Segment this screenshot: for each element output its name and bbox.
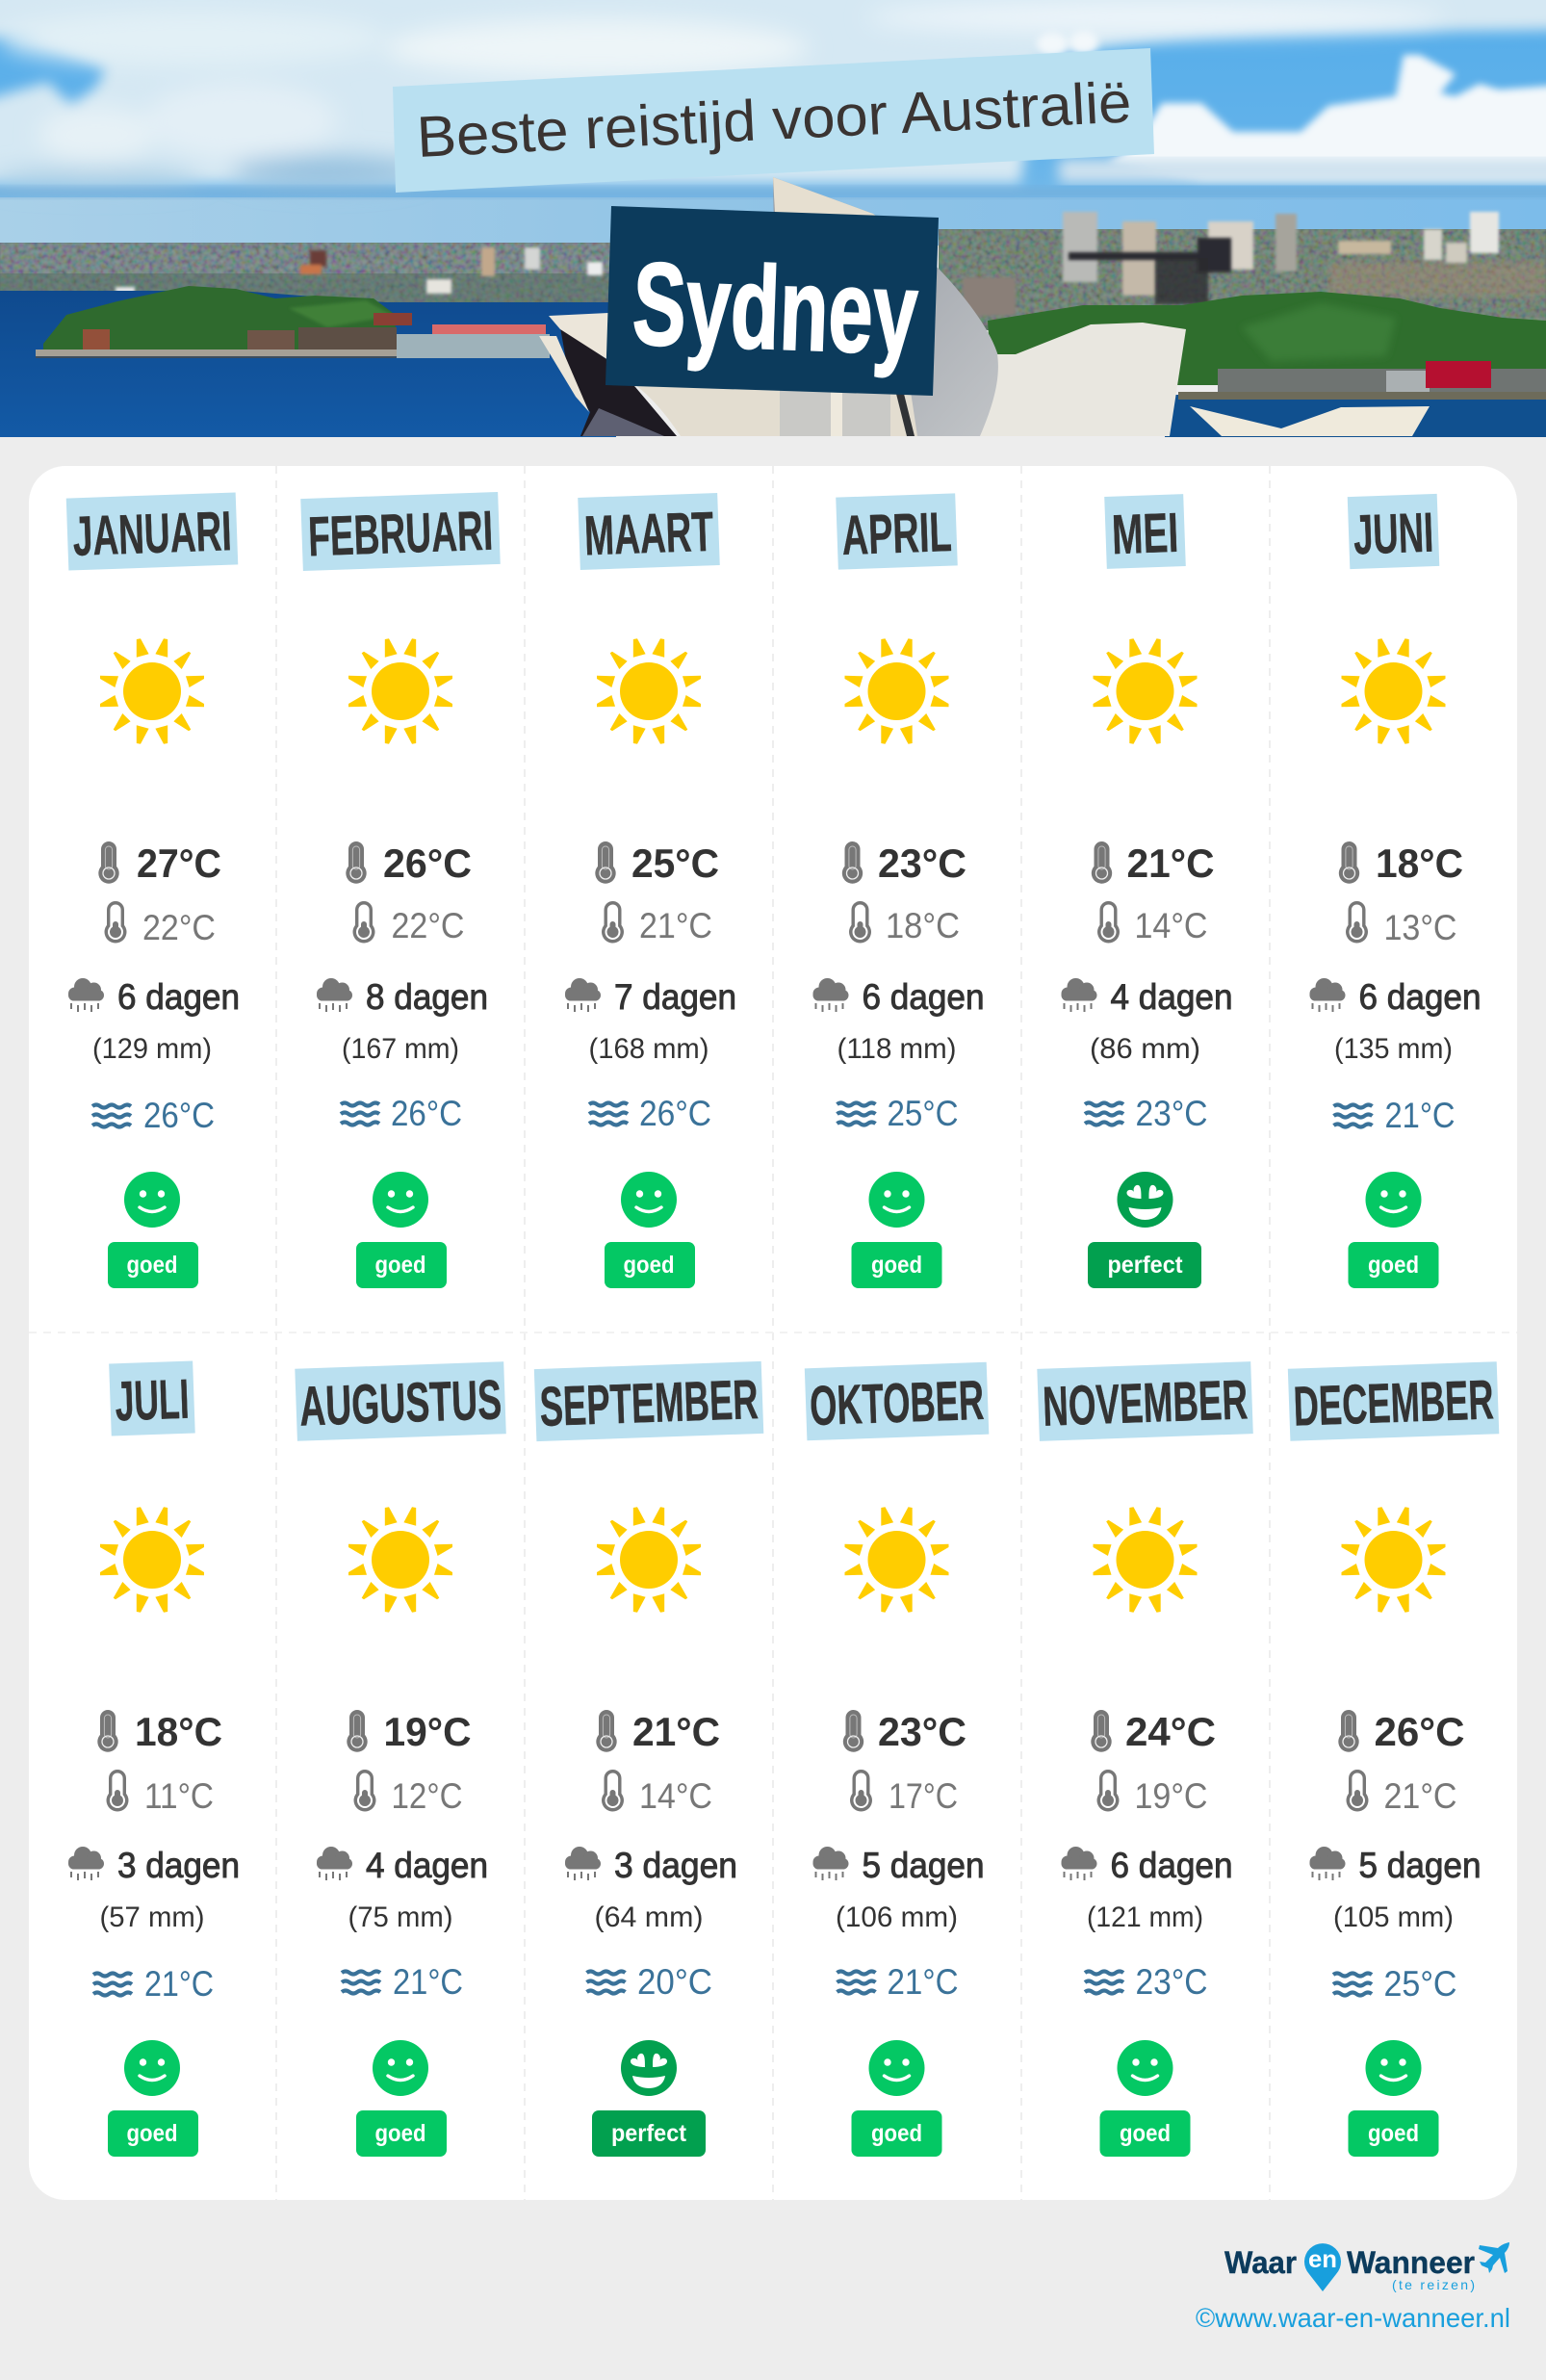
rating: [108, 1242, 198, 1288]
ferry: [397, 334, 550, 358]
column: april: [812, 493, 984, 1288]
rain days: 7 dagen: [614, 977, 736, 1017]
icon: sun: [1342, 1507, 1446, 1613]
rain days: 4 dagen: [1111, 977, 1232, 1017]
rain days: [317, 977, 488, 1017]
rating: goed: [871, 2120, 922, 2147]
rainfall: (135 mm): [1334, 1033, 1453, 1065]
city heading: Sydney: Sydney: [631, 238, 920, 378]
icon: smiley: [124, 2040, 180, 2096]
sea temperature: 21°C: [144, 1964, 214, 2004]
rain days: [317, 1846, 488, 1885]
sea temperature: 25°C: [1384, 1964, 1457, 2004]
rating: goed: [1120, 2120, 1171, 2147]
towers: [963, 212, 1499, 316]
town right: [939, 229, 1546, 330]
maximum temperature: [596, 1709, 720, 1754]
rainfall: (106 mm): [836, 1901, 958, 1933]
maximum temperature: [1092, 841, 1215, 886]
icon: smiley: [373, 1172, 428, 1228]
icon: sun: [1342, 638, 1446, 744]
month tag: [836, 493, 958, 570]
rain days: [1309, 1846, 1481, 1885]
maximum temperature: 27°C: [137, 841, 221, 886]
icon: smiley: [124, 1172, 180, 1228]
rain days: 6 dagen: [863, 977, 984, 1017]
rating: [592, 2110, 706, 2157]
rating: [356, 2110, 447, 2157]
rain days: [1309, 977, 1481, 1017]
month tag: SEPTEMBER: [539, 1368, 760, 1438]
sea temperature: 26°C: [143, 1096, 215, 1135]
minimum temperature: 11°C: [144, 1776, 214, 1816]
rating: goed: [1368, 2120, 1419, 2147]
icon: smiley: [868, 1172, 924, 1228]
maximum temperature: 18°C: [1376, 841, 1463, 886]
icon: location pin: [1304, 2243, 1341, 2291]
minimum temperature: [104, 901, 216, 947]
column: december: [1288, 1361, 1499, 2157]
rating: [851, 2110, 941, 2157]
month tag: AUGUSTUS: [298, 1368, 502, 1438]
minimum temperature: [850, 1770, 958, 1816]
minimum temperature: 22°C: [142, 908, 216, 947]
hero photo: Sydney harbour: [0, 0, 1546, 437]
icon: sun: [348, 638, 452, 744]
month tag: [300, 492, 501, 571]
town left: [0, 243, 616, 304]
rain days: 4 dagen: [366, 1846, 488, 1885]
sea temperature: 23°C: [1136, 1962, 1207, 2002]
panel: climate table: [29, 466, 1517, 2200]
maximum temperature: 23°C: [878, 1709, 966, 1754]
rain days: [1061, 1846, 1232, 1885]
minimum temperature: 17°C: [889, 1776, 958, 1816]
sea temperature: [1333, 1964, 1457, 2004]
maximum temperature: [98, 841, 221, 886]
icon: smiley: [1365, 2040, 1421, 2096]
icon: smiley: [1365, 1172, 1421, 1228]
rain days: [565, 1846, 737, 1885]
icon: smiley: [868, 2040, 924, 2096]
rainfall: (64 mm): [595, 1901, 703, 1933]
minimum temperature: [352, 901, 464, 945]
opera house sails: [773, 177, 1002, 436]
rain days: 6 dagen: [117, 977, 240, 1017]
title banner: Beste reistijd voor Australië: [415, 69, 1133, 169]
sea temperature: 21°C: [1384, 1096, 1456, 1135]
rain days: 5 dagen: [1359, 1846, 1481, 1885]
maximum temperature: 21°C: [1126, 841, 1215, 886]
month tag: [1348, 494, 1439, 569]
rating: [1088, 1242, 1201, 1288]
maximum temperature: 26°C: [1375, 1709, 1465, 1754]
month tag: OKTOBER: [809, 1369, 985, 1437]
month tag: [66, 492, 238, 571]
rain days: [68, 1846, 240, 1885]
rating: goed: [624, 1252, 674, 1279]
clouds right: [1037, 31, 1546, 180]
rating: perfect: [611, 2120, 687, 2147]
harbour water: [0, 291, 616, 437]
rain days: 6 dagen: [1359, 977, 1481, 1017]
rating: goed: [127, 1252, 177, 1279]
rain days: 3 dagen: [614, 1846, 737, 1885]
column: oktober: [805, 1362, 989, 2157]
maximum temperature: 23°C: [878, 841, 966, 886]
maximum temperature: [97, 1709, 222, 1754]
rating: perfect: [1107, 1252, 1183, 1279]
rainfall: (168 mm): [589, 1033, 709, 1065]
column: juni: [1309, 494, 1481, 1288]
title banner: [393, 48, 1154, 193]
logo: Waar en Wanneer: Wanneer: [1347, 2245, 1475, 2280]
rain days: 6 dagen: [1111, 1846, 1232, 1885]
rating: goed: [871, 1252, 922, 1279]
rating: [1348, 2110, 1438, 2157]
minimum temperature: [602, 901, 712, 945]
logo: Waar en Wanneer: Waar: [1224, 2245, 1297, 2280]
rating: [356, 1242, 447, 1288]
maximum temperature: 26°C: [383, 841, 472, 886]
minimum temperature: [1346, 1770, 1457, 1816]
rating: [108, 2110, 198, 2157]
rainfall: (129 mm): [92, 1033, 212, 1065]
rating: goed: [127, 2120, 177, 2147]
icon: smiley: [1117, 2040, 1172, 2096]
month tag: [578, 493, 720, 570]
island trees: [43, 286, 397, 352]
sea temperature: 23°C: [1136, 1094, 1207, 1133]
column: mei: [1061, 494, 1232, 1288]
icon: love smiley: [621, 2040, 677, 2096]
column: maart: [565, 493, 736, 1288]
right pier: [1218, 369, 1546, 392]
month tag: APRIL: [840, 501, 953, 567]
minimum temperature: 14°C: [1134, 906, 1207, 945]
rain days: 5 dagen: [863, 1846, 984, 1885]
rain days: [68, 977, 240, 1017]
month tag: FEBRUARI: [307, 500, 494, 568]
rating: [851, 1242, 941, 1288]
month tag: [109, 1361, 195, 1436]
sea temperature: 21°C: [393, 1962, 463, 2002]
minimum temperature: [1097, 1770, 1207, 1816]
sea temperature: [1334, 1096, 1456, 1135]
column: augustus: [295, 1361, 506, 2157]
harbour bridge dark: [1069, 238, 1231, 304]
rating: [605, 1242, 695, 1288]
sea temperature: [92, 1096, 215, 1135]
icon: location pin: en: [1308, 2246, 1337, 2273]
minimum temperature: [1346, 901, 1457, 947]
sea temperature: [1085, 1094, 1207, 1133]
rainfall: (86 mm): [1090, 1033, 1200, 1065]
icon: sun: [597, 1507, 701, 1613]
month tag: MEI: [1111, 502, 1179, 566]
sea temperature: [837, 1094, 959, 1133]
icon: smiley: [621, 1172, 677, 1228]
rating: goed: [1368, 1252, 1419, 1279]
maximum temperature: 24°C: [1125, 1709, 1216, 1754]
rainfall: (75 mm): [348, 1901, 452, 1933]
minimum temperature: [849, 901, 960, 945]
minimum temperature: 14°C: [639, 1776, 712, 1816]
rainfall: (121 mm): [1087, 1901, 1203, 1933]
icon: airplane: [1479, 2242, 1509, 2273]
month tag: JULI: [114, 1368, 191, 1433]
month tag: [805, 1362, 989, 1440]
sea temperature: [589, 1094, 711, 1133]
month tag: [1104, 494, 1186, 569]
maximum temperature: [595, 841, 719, 886]
icon: sun: [1094, 1507, 1198, 1613]
minimum temperature: 21°C: [1384, 1776, 1457, 1816]
sea temperature: [1085, 1962, 1207, 2002]
sea temperature: 25°C: [888, 1094, 959, 1133]
sea temperature: [837, 1962, 959, 2002]
maximum temperature: [346, 841, 472, 886]
icon: sun: [597, 638, 701, 744]
column: januari: [66, 492, 240, 1288]
logo: Waar en Wanneer: (te reizen): [1392, 2277, 1475, 2292]
minimum temperature: [106, 1770, 214, 1816]
minimum temperature: 18°C: [886, 906, 960, 945]
maximum temperature: 19°C: [383, 1709, 472, 1754]
month tag: [1037, 1361, 1253, 1441]
icon: love smiley: [1117, 1172, 1172, 1228]
column: februari: [300, 492, 501, 1288]
maximum temperature: 18°C: [135, 1709, 222, 1754]
city heading: Sydney: [606, 206, 939, 396]
column: september: [534, 1361, 763, 2157]
rating: [1348, 1242, 1438, 1288]
rain days: [812, 977, 984, 1017]
icon: sun: [845, 638, 949, 744]
rainfall: (167 mm): [342, 1033, 459, 1065]
icon: smiley: [373, 2040, 428, 2096]
column: juli: [68, 1361, 240, 2157]
rating: [1099, 2110, 1190, 2157]
minimum temperature: 19°C: [1134, 1776, 1207, 1816]
sea temperature: [342, 1962, 463, 2002]
maximum temperature: [347, 1709, 472, 1754]
right trees: [988, 292, 1546, 385]
column: november: [1037, 1361, 1253, 2157]
logo: Waar en Wanneer: [1224, 2242, 1509, 2292]
icon: sun: [100, 1507, 204, 1613]
rain days: [1061, 977, 1232, 1017]
sea temperature: 26°C: [391, 1094, 462, 1133]
rain days: 3 dagen: [117, 1846, 240, 1885]
sea temperature: 21°C: [888, 1962, 959, 2002]
sea temperature: [587, 1962, 712, 2002]
icon: sun: [1094, 638, 1198, 744]
rain days: 8 dagen: [366, 977, 488, 1017]
month tag: [295, 1361, 506, 1441]
icon: sun: [348, 1507, 452, 1613]
rainfall: (118 mm): [837, 1033, 957, 1065]
month tag: JANUARI: [72, 500, 233, 568]
minimum temperature: 22°C: [391, 906, 464, 945]
sea temperature: [341, 1094, 462, 1133]
minimum temperature: [1097, 901, 1207, 945]
maximum temperature: [1339, 841, 1463, 886]
rainfall: (105 mm): [1333, 1901, 1454, 1933]
rainfall: (57 mm): [100, 1901, 204, 1933]
month tag: JUNI: [1353, 502, 1434, 566]
maximum temperature: 21°C: [632, 1709, 720, 1754]
icon: sun: [845, 1507, 949, 1613]
minimum temperature: 12°C: [391, 1776, 462, 1816]
island buildings and pier: [83, 329, 110, 349]
source link: ©www.waar-en-wanneer.nl: [1196, 2303, 1510, 2333]
minimum temperature: [602, 1770, 712, 1816]
rating: goed: [375, 1252, 425, 1279]
minimum temperature: [354, 1770, 462, 1816]
month tag: NOVEMBER: [1042, 1368, 1249, 1438]
maximum temperature: 25°C: [631, 841, 719, 886]
minimum temperature: 21°C: [639, 906, 712, 945]
sea temperature: 20°C: [637, 1962, 712, 2002]
minimum temperature: 13°C: [1384, 908, 1457, 947]
month tag: MAART: [583, 501, 714, 567]
sea temperature: 26°C: [639, 1094, 711, 1133]
rating: goed: [375, 2120, 425, 2147]
rain days: [565, 977, 736, 1017]
rain days: [812, 1846, 984, 1885]
month tag: [534, 1361, 763, 1441]
sea temperature: [93, 1964, 214, 2004]
icon: sun: [100, 638, 204, 744]
